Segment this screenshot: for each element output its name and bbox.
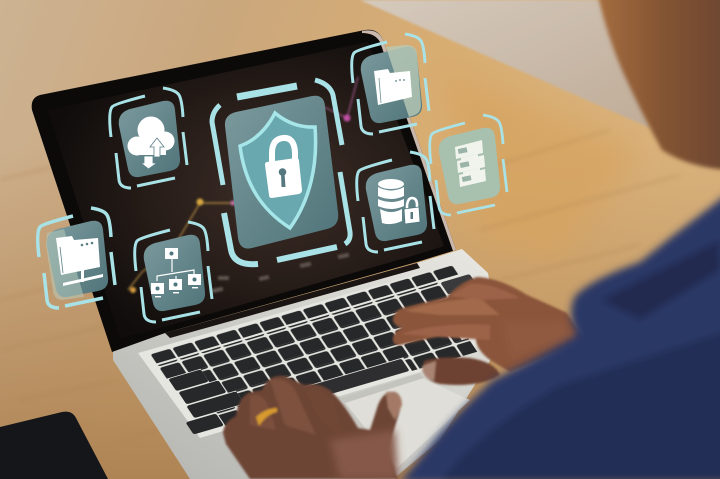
laptop base (113, 249, 500, 479)
keyboard (141, 262, 514, 435)
phone on desk (0, 412, 108, 479)
main icon brackets (212, 80, 350, 264)
database lock (404, 198, 420, 224)
icon: cloud transfer (110, 88, 187, 188)
screen chart axis labels (212, 253, 349, 293)
keyboard well (138, 265, 480, 438)
padlock (265, 138, 302, 198)
person's head blurred (597, 0, 720, 170)
icon: server rack right (430, 115, 507, 215)
back wall (360, 0, 650, 128)
hinge shadow (165, 263, 420, 338)
right hand (typing) (393, 277, 585, 385)
left hand (typing) with ring (223, 376, 402, 479)
icon: folder top right (352, 34, 429, 134)
trackpad (343, 377, 470, 468)
wood grain (0, 130, 680, 440)
shield (240, 113, 316, 228)
person's sleeve (400, 192, 720, 479)
icon: main shield padlock (212, 80, 350, 264)
laptop screen (32, 30, 456, 352)
screen chart lines (128, 77, 358, 293)
icon: folder network left (38, 208, 115, 308)
icon: network hierarchy (135, 222, 212, 322)
icon: database with lock (357, 152, 434, 252)
